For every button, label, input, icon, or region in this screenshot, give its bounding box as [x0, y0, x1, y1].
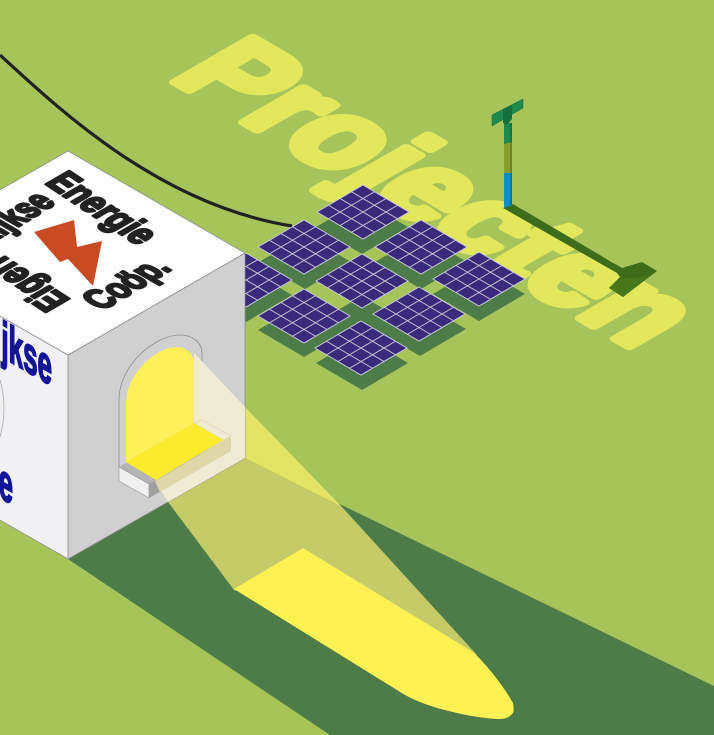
pole olive section	[504, 142, 512, 173]
solar panel	[200, 253, 292, 307]
solar panel field	[200, 185, 525, 390]
solar panel	[316, 254, 408, 308]
window lit opening	[126, 347, 194, 462]
cube right face	[68, 253, 245, 559]
solar panel	[258, 289, 350, 343]
cable	[0, 55, 292, 226]
solar panel	[317, 185, 409, 239]
pole blue section	[504, 173, 512, 208]
light beam over the shadow	[168, 458, 477, 655]
light beam on the cube wall	[156, 353, 245, 502]
logo bolt	[34, 220, 102, 286]
window sill side	[149, 436, 231, 498]
window ledge outline in the beam	[194, 420, 231, 440]
sign pole	[492, 99, 523, 208]
solar panel	[375, 220, 467, 274]
solar panel	[433, 252, 525, 306]
window recess outline	[119, 335, 202, 467]
logo text: Energie: Energie	[36, 166, 168, 250]
light pool on the ground	[234, 548, 514, 719]
panel shadows	[200, 200, 525, 390]
window sill top	[119, 420, 231, 484]
cube left face	[0, 253, 68, 559]
solar panel	[373, 287, 465, 341]
cube shadow on the ground	[68, 458, 714, 735]
light beam over the grass	[245, 407, 342, 507]
sign crossbar	[492, 99, 523, 126]
pole green section	[504, 123, 512, 144]
window sill front	[119, 467, 149, 498]
cube top face	[0, 151, 245, 355]
pole shadow on the ground	[503, 204, 657, 297]
logo text: Coop: Coöp.	[73, 252, 181, 316]
side logo arc	[0, 380, 4, 437]
lit floor of the window	[126, 423, 223, 480]
solar panel	[315, 321, 407, 375]
lit sill side	[155, 436, 231, 492]
solar panel	[258, 220, 350, 274]
building cube	[0, 151, 245, 559]
